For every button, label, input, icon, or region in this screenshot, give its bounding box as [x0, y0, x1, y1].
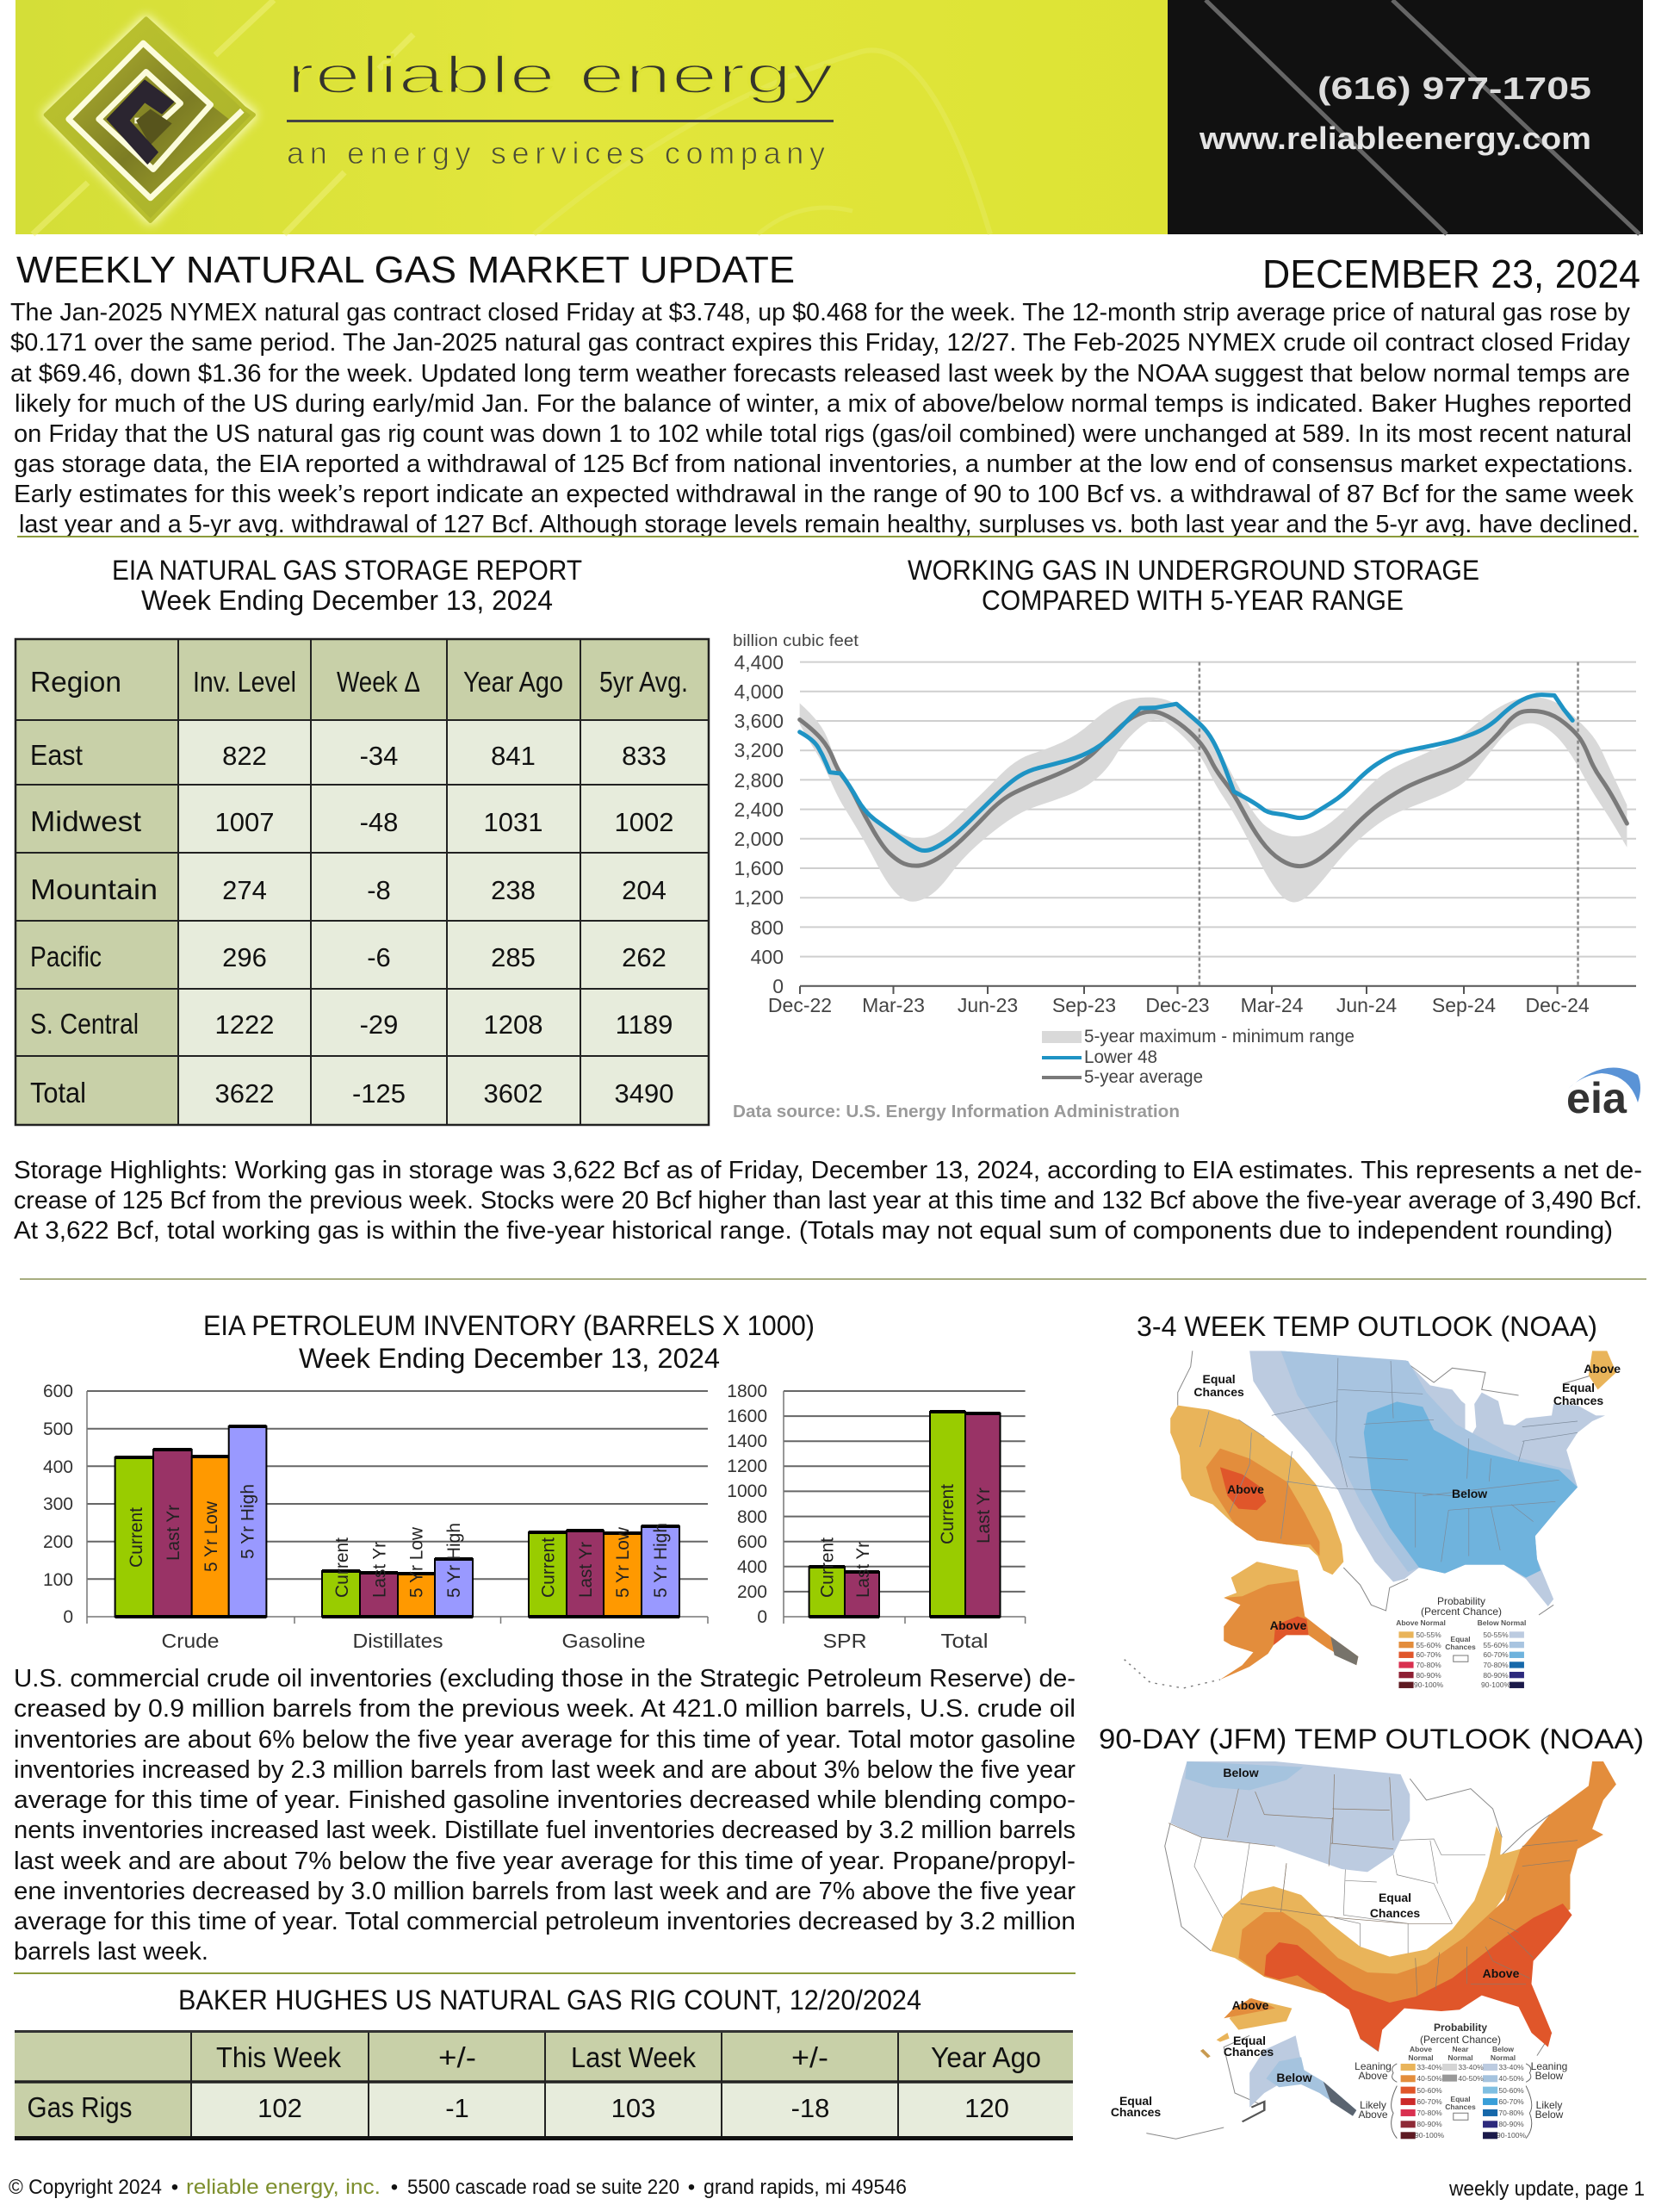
heading: petroleum inventory: [203, 1310, 815, 1374]
y axis labels: 400: [751, 946, 784, 968]
y axis labels: 0: [63, 1607, 73, 1627]
map legend: Chances: [1445, 1643, 1476, 1651]
chart legend: 5-year average: [1084, 1067, 1203, 1087]
storage table: 1208: [484, 1009, 542, 1040]
heading: 3-4 week outlook: 3-4 WEEK TEMP OUTLOOK (NOAA): [1137, 1311, 1597, 1342]
map legend: Probability: [1434, 2022, 1487, 2034]
heading: working gas chart: COMPARED WITH 5-YEAR RANGE: [982, 585, 1404, 616]
market summary text: $0.171 over the same period. The Jan-2025 natural gas contract expires this Friday, 12/27. The Feb-2025 NYMEX crude oil contract closed Friday: [10, 329, 1630, 357]
storage table: 1031: [484, 807, 542, 837]
map labels: Above: [1232, 1998, 1269, 2012]
bar labels: 5 Yr High: [238, 1484, 258, 1559]
map labels: Equal: [1233, 2034, 1266, 2047]
rig count table: 102: [257, 2093, 302, 2123]
map labels: Above: [1227, 1482, 1264, 1496]
y axis labels: 4,000: [734, 680, 784, 703]
heading: petroleum inventory: EIA PETROLEUM INVENTORY (BARRELS X 1000): [203, 1310, 815, 1341]
y axis labels: 1000: [727, 1481, 767, 1501]
heading: working gas chart: WORKING GAS IN UNDERGROUND STORAGE: [908, 555, 1479, 586]
petroleum commentary text: ene inventories decreased by 3.0 million barrels from last week and are 7% above the five year: [14, 1878, 1076, 1905]
map legend: 70-80%: [1483, 1661, 1509, 1669]
map legend: 90-100%: [1414, 1680, 1443, 1689]
footer: •: [391, 2176, 398, 2199]
map legend: 50-60%: [1417, 2086, 1442, 2095]
petroleum commentary text: average for this time of year. Total commercial petroleum inventories decreased by 3.2 million: [14, 1908, 1076, 1935]
map legend: Normal: [1491, 2053, 1516, 2062]
storage table: East: [30, 739, 83, 771]
map legend: 33-40%: [1498, 2063, 1524, 2071]
x axis labels: Jun-23: [958, 994, 1018, 1016]
bar labels: 5 Yr Low: [407, 1526, 427, 1598]
map legend: (Percent Chance): [1420, 2034, 1501, 2046]
map legend: 50-55%: [1416, 1630, 1441, 1639]
storage table: -48: [360, 807, 398, 837]
map labels: Below: [1223, 1766, 1259, 1780]
category labels: Gasoline: [561, 1630, 646, 1652]
y axis labels: 4,400: [734, 651, 784, 674]
map legend: Chances: [1445, 2103, 1476, 2111]
map legend: 55-60%: [1416, 1641, 1441, 1649]
chart legend: [1042, 1027, 1355, 1087]
map labels: Above: [1483, 1966, 1520, 1980]
storage table: 3602: [484, 1078, 542, 1109]
storage highlights text: [14, 1157, 1642, 1245]
x axis labels: Jun-24: [1336, 994, 1397, 1016]
map legend: 70-80%: [1416, 1661, 1441, 1669]
storage table: -29: [360, 1009, 398, 1040]
petroleum commentary text: U.S. commercial crude oil inventories (excluding those in the Strategic Petroleum Reserve) de-: [14, 1665, 1076, 1693]
rig count table: -1: [445, 2093, 469, 2123]
storage table: 262: [622, 942, 666, 972]
x axis labels: Dec-22: [768, 994, 832, 1016]
y axis labels: 600: [43, 1382, 73, 1401]
bar labels: Current: [127, 1507, 146, 1568]
bar labels: 5 Yr Low: [201, 1500, 221, 1572]
y axis labels: 1800: [727, 1382, 767, 1401]
map legend: Equal: [1450, 1635, 1471, 1643]
storage table: 841: [491, 741, 536, 771]
rig count table: -18: [791, 2093, 829, 2123]
chart legend: 5-year maximum - minimum range: [1084, 1027, 1355, 1047]
storage table: Region: [30, 666, 121, 698]
bar labels: Last Yr: [974, 1488, 994, 1544]
storage table: 822: [222, 741, 267, 771]
map legend: [1396, 1595, 1526, 1689]
market summary text: on Friday that the US natural gas rig count was down 1 to 102 while total rigs (gas/oil combined) were unchanged at 589. In its most recent natural: [14, 420, 1632, 448]
storage table: Mountain: [30, 873, 158, 905]
y axis labels: 400: [737, 1557, 767, 1577]
petroleum commentary text: inventories increased by 2.3 million barrels from last week and are about 3% below the five year: [14, 1756, 1076, 1784]
heading: storage report: Week Ending December 13, 2024: [141, 585, 553, 616]
y axis labels: [43, 1382, 73, 1627]
y axis labels: 200: [43, 1532, 73, 1552]
rig count table: Last Week: [571, 2041, 696, 2073]
footer: weekly update, page 1: [1448, 2177, 1645, 2201]
map labels: Chances: [1111, 2105, 1161, 2119]
storage table: S. Central: [30, 1008, 139, 1040]
bar chart: SPR and total: [727, 1382, 1026, 1652]
map labels: Equal: [1119, 2094, 1152, 2108]
footer: 5500 cascade road se suite 220: [407, 2176, 679, 2199]
bar labels: 5 Yr High: [444, 1523, 464, 1598]
y axis labels: [727, 1382, 767, 1627]
map legend: Above: [1410, 2045, 1432, 2053]
x axis labels: Sep-23: [1052, 994, 1116, 1016]
rig count table: Year Ago: [931, 2041, 1041, 2073]
chart legend: Lower 48: [1084, 1047, 1157, 1067]
storage table: Inv. Level: [193, 666, 296, 698]
storage table: 1007: [215, 807, 274, 837]
map legend: Below: [1492, 2045, 1514, 2053]
map labels: Equal: [1203, 1372, 1236, 1386]
storage table: [15, 639, 709, 1125]
category labels: [162, 1630, 646, 1652]
y axis labels: 3,200: [734, 739, 784, 761]
map legend: 60-70%: [1417, 2097, 1442, 2106]
rig count table: 120: [964, 2093, 1009, 2123]
map legend: Near: [1453, 2045, 1469, 2053]
map labels: Above: [1270, 1618, 1307, 1632]
market summary text: gas storage data, the EIA reported a withdrawal of 125 Bcf from national inventories, a number at the low end of consensus market expectations.: [14, 450, 1634, 478]
map labels: Below: [1276, 2071, 1312, 2084]
map legend: Above: [1358, 2109, 1388, 2121]
storage table: 833: [622, 741, 666, 771]
storage table: 1002: [615, 807, 673, 837]
map legend: Equal: [1450, 2095, 1471, 2103]
footer: reliable energy, inc.: [186, 2176, 381, 2199]
main title: WEEKLY NATURAL GAS MARKET UPDATE: [16, 249, 795, 291]
map legend: 70-80%: [1498, 2109, 1524, 2117]
tagline: an energy services company: [287, 135, 825, 171]
map labels: [1111, 1766, 1520, 2119]
rig count table: This Week: [216, 2041, 341, 2073]
y axis labels: 600: [737, 1532, 767, 1552]
phone number: (616) 977-1705: [1317, 71, 1591, 106]
y axis labels: 2,400: [734, 798, 784, 821]
category labels: Distillates: [353, 1630, 443, 1652]
y axis labels: 0: [772, 975, 784, 997]
y axis labels: 1600: [727, 1407, 767, 1426]
footer: [9, 2176, 1645, 2201]
date: DECEMBER 23, 2024: [1262, 252, 1640, 296]
rig count table: Gas Rigs: [28, 2091, 133, 2123]
map legend: (Percent Chance): [1421, 1606, 1502, 1618]
x axis labels: Dec-23: [1145, 994, 1210, 1016]
market summary text: at $69.46, down $1.36 for the week. Updated long term weather forecasts released last week by the NOAA suggest that below normal temps are: [10, 360, 1630, 388]
map legend: 80-90%: [1498, 2120, 1524, 2128]
storage table: 1189: [616, 1009, 673, 1040]
storage table: -34: [360, 741, 398, 771]
map labels: Chances: [1553, 1394, 1603, 1407]
y axis labels: 1400: [727, 1432, 767, 1451]
footer: grand rapids, mi 49546: [704, 2176, 907, 2199]
market summary text: likely for much of the US during early/mid Jan. For the balance of winter, a mix of above/below normal temps is indicated. Baker Hughes reported: [15, 390, 1632, 418]
y axis labels: 400: [43, 1457, 73, 1477]
storage table: 1222: [215, 1009, 274, 1040]
petroleum commentary text: barrels last week.: [14, 1938, 208, 1966]
storage highlights text: Storage Highlights: Working gas in storage was 3,622 Bcf as of Friday, December 13, 2024, according to EIA estimates. This represents a net de-: [14, 1157, 1642, 1184]
storage table: 5yr Avg.: [599, 666, 688, 698]
storage highlights text: At 3,622 Bcf, total working gas is within the five-year historical range. (Totals may not equal sum of components due to independent rounding): [14, 1217, 1613, 1245]
x axis labels: Mar-24: [1241, 994, 1304, 1016]
map legend: Above Normal: [1396, 1618, 1446, 1627]
map legend: 90-100%: [1481, 1680, 1510, 1689]
map legend: Below Normal: [1478, 1618, 1526, 1627]
storage table: 3622: [215, 1078, 274, 1109]
bar labels: Current: [332, 1537, 352, 1598]
category labels: SPR: [823, 1630, 866, 1652]
heading: working gas chart: [908, 555, 1479, 616]
bar labels: Current: [938, 1484, 958, 1544]
map labels: Chances: [1224, 2045, 1274, 2059]
y axis labels: [734, 651, 784, 997]
storage table: 204: [622, 875, 666, 905]
storage table: Year Ago: [463, 666, 563, 698]
y axis labels: 3,600: [734, 710, 784, 732]
y axis labels: 800: [751, 916, 784, 939]
rig count table: +/-: [438, 2041, 476, 2073]
bar chart: crude, distillates, gasoline: [43, 1382, 708, 1652]
map legend: 33-40%: [1458, 2063, 1484, 2071]
x axis labels: Mar-23: [862, 994, 925, 1016]
y axis labels: 800: [737, 1507, 767, 1527]
x axis labels: [768, 994, 1590, 1016]
petroleum commentary text: [14, 1665, 1076, 1966]
map labels: Equal: [1379, 1891, 1411, 1904]
y axis labels: 100: [43, 1570, 73, 1590]
map legend: 50-55%: [1483, 1630, 1509, 1639]
map legend: 33-40%: [1417, 2063, 1442, 2071]
map labels: Chances: [1370, 1906, 1420, 1920]
storage table: Week Δ: [337, 666, 420, 698]
map legend: 80-90%: [1417, 2120, 1442, 2128]
map legend: 40-50%: [1498, 2074, 1524, 2083]
brand name: reliable energy: [287, 46, 834, 104]
map labels: [1193, 1362, 1621, 1632]
y axis labels: 1200: [727, 1457, 767, 1476]
bar labels: Last Yr: [853, 1542, 873, 1598]
map: 3-4 week temperature outlook: [1125, 1351, 1621, 1689]
icon: reliable energy diamond logo: [46, 19, 254, 221]
y axis labels: 1,600: [734, 857, 784, 879]
rig count table: 103: [611, 2093, 655, 2123]
heading: 90-day outlook: 90-DAY (JFM) TEMP OUTLOOK (NOAA): [1099, 1724, 1644, 1755]
market summary text: last year and a 5-yr avg. withdrawal of 127 Bcf. Although storage levels remain healthy, surpluses vs. both last year and the 5-yr avg. have declined.: [19, 511, 1639, 538]
storage highlights text: crease of 125 Bcf from the previous week. Stocks were 20 Bcf higher than last year at this time and 132 Bcf above the five-year average of 3,490 Bcf.: [14, 1187, 1642, 1214]
bar labels: Last Yr: [164, 1505, 183, 1561]
map legend: Below: [1535, 2070, 1564, 2082]
map legend: Leaning: [1355, 2060, 1392, 2072]
map legend: 50-60%: [1498, 2086, 1524, 2095]
market summary text: The Jan-2025 NYMEX natural gas contract closed Friday at $3.748, up $0.468 for the week. The 12-month strip average price of natural gas rose by: [10, 299, 1630, 326]
footer: •: [688, 2176, 695, 2199]
map legend: [1355, 2022, 1567, 2140]
map legend: Normal: [1408, 2053, 1434, 2062]
map legend: 70-80%: [1417, 2109, 1442, 2117]
heading: rig count: BAKER HUGHES US NATURAL GAS RIG COUNT, 12/20/2024: [178, 1984, 921, 2016]
storage table: -6: [367, 942, 391, 972]
map legend: Likely: [1536, 2099, 1562, 2111]
y axis labels: 2,000: [734, 828, 784, 850]
storage table: 285: [491, 942, 536, 972]
storage table: 296: [222, 942, 267, 972]
map legend: 90-100%: [1415, 2131, 1444, 2140]
y axis labels: 200: [737, 1582, 767, 1602]
data source: Data source: U.S. Energy Information Administration: [733, 1102, 1180, 1121]
x axis labels: Sep-24: [1432, 994, 1496, 1016]
category labels: [823, 1630, 989, 1652]
rig count table: +/-: [791, 2041, 828, 2073]
map legend: 60-70%: [1498, 2097, 1524, 2106]
bar labels: Current: [818, 1537, 838, 1598]
map legend: 55-60%: [1483, 1641, 1509, 1649]
footer: •: [171, 2176, 178, 2199]
bar labels: Last Yr: [370, 1542, 390, 1598]
bar labels: [818, 1484, 994, 1598]
storage table: Midwest: [30, 805, 141, 837]
storage table: -8: [367, 875, 391, 905]
map legend: 60-70%: [1483, 1650, 1509, 1659]
bar labels: 5 Yr Low: [613, 1526, 633, 1598]
petroleum commentary text: average for this time of year. Finished gasoline inventories decreased while blending compo-: [14, 1786, 1076, 1814]
footer: © Copyright 2024: [9, 2176, 162, 2199]
y axis labels: 0: [757, 1607, 767, 1627]
storage table: 3490: [615, 1078, 673, 1109]
rig count table: [15, 2030, 1073, 2140]
bar labels: 5 Yr High: [651, 1523, 671, 1598]
map legend: Probability: [1437, 1595, 1485, 1607]
bar labels: Last Yr: [576, 1542, 596, 1598]
website: www.reliableenergy.com: [1199, 121, 1591, 156]
line chart: working gas in storage: [733, 632, 1640, 1122]
map labels: Chances: [1193, 1385, 1244, 1399]
heading: petroleum inventory: Week Ending December 13, 2024: [299, 1343, 720, 1374]
y axis labels: 1,200: [734, 886, 784, 909]
map legend: 40-50%: [1458, 2074, 1484, 2083]
header banner: [15, 0, 1643, 234]
bar labels: Current: [539, 1537, 559, 1598]
map legend: 60-70%: [1416, 1650, 1441, 1659]
map labels: Above: [1584, 1362, 1621, 1376]
storage table: Pacific: [30, 941, 102, 972]
y axis labels: 500: [43, 1419, 73, 1439]
heading: storage report: [112, 555, 582, 616]
map legend: Likely: [1360, 2099, 1386, 2111]
storage table: -125: [352, 1078, 406, 1109]
heading: storage report: EIA NATURAL GAS STORAGE REPORT: [112, 555, 582, 586]
market summary text: [10, 299, 1639, 538]
map legend: 80-90%: [1483, 1671, 1509, 1680]
petroleum commentary text: creased by 0.9 million barrels from the previous week. At 421.0 million barrels, U.S. crude oil: [14, 1695, 1076, 1723]
map legend: 40-50%: [1417, 2074, 1442, 2083]
petroleum commentary text: last week and are about 7% below the five year average for this time of year. Propane/propyl-: [14, 1848, 1076, 1875]
line chart: working gas in storage: billion cubic feet: [733, 632, 859, 650]
category labels: Crude: [162, 1630, 219, 1652]
storage table: 274: [222, 875, 267, 905]
map legend: Normal: [1448, 2053, 1473, 2062]
map legend: Below: [1535, 2109, 1564, 2121]
map: 90-day temperature outlook: [1111, 1761, 1616, 2140]
market summary text: Early estimates for this week’s report indicate an expected withdrawal in the range of 90 to 100 Bcf vs. a withdrawal of 87 Bcf for the same week: [14, 481, 1634, 508]
map legend: 90-100%: [1497, 2131, 1526, 2140]
map legend: Above: [1358, 2070, 1388, 2082]
bar labels: [127, 1484, 671, 1598]
map labels: Equal: [1562, 1381, 1595, 1394]
storage table: 238: [491, 875, 536, 905]
map legend: Leaning: [1531, 2060, 1567, 2072]
petroleum commentary text: inventories are about 6% below the five year average for this time of year. Total motor gasoline: [14, 1726, 1076, 1754]
category labels: Total: [940, 1630, 989, 1652]
y axis labels: 2,800: [734, 769, 784, 792]
x axis labels: Dec-24: [1526, 994, 1590, 1016]
petroleum commentary text: nents inventories increased last week. Distillate fuel inventories decreased by 3.2 million barrels: [14, 1817, 1076, 1844]
storage table: Total: [30, 1077, 86, 1109]
map legend: 80-90%: [1416, 1671, 1441, 1680]
y axis labels: 300: [43, 1494, 73, 1514]
map labels: Below: [1452, 1487, 1487, 1500]
icon: eia logo: eia: [1566, 1074, 1627, 1122]
